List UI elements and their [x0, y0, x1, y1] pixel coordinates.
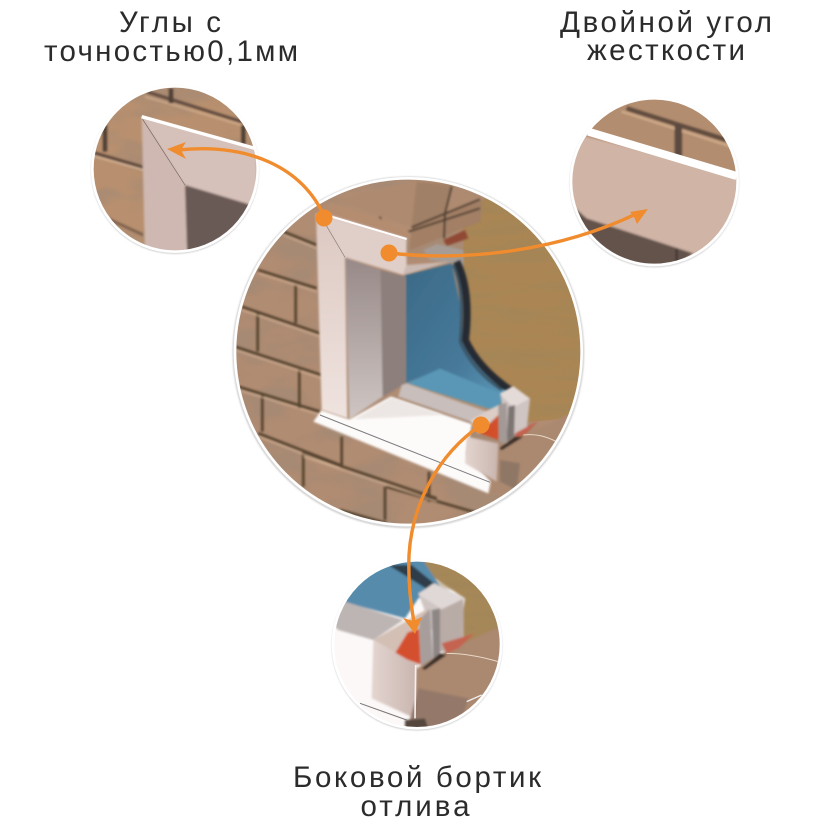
title: side flange: Боковой бортик [293, 761, 542, 794]
detail circle: stiffening angle [567, 97, 743, 270]
title: corners: Углы с [119, 6, 221, 39]
wall bricks background [236, 180, 561, 524]
title: double stiffening angle: жесткости [587, 34, 745, 67]
detail circle: side flange [328, 558, 508, 735]
trim: head and jamb [316, 203, 450, 418]
detail circle: corners [87, 83, 263, 257]
title: side flange [293, 761, 542, 821]
inner reveals [345, 257, 406, 419]
main circle: window opening in brick wall [230, 170, 590, 530]
side flange and end block [465, 386, 538, 490]
arrow: main window to corners detail [167, 142, 332, 226]
window glass and seal [405, 262, 510, 412]
arrow: main window to side flange detail [403, 416, 490, 634]
top bricks [378, 182, 485, 265]
lower right cut wall [557, 414, 568, 420]
title: corners: точностью0,1мм [44, 35, 298, 68]
white sill [313, 383, 497, 493]
title: corners [44, 6, 298, 68]
title: double stiffening angle: Двойной угол [560, 6, 772, 39]
title: double stiffening angle [560, 6, 772, 67]
insulation layer [460, 198, 590, 423]
arrow: main window to stiffening angle detail [380, 209, 648, 262]
